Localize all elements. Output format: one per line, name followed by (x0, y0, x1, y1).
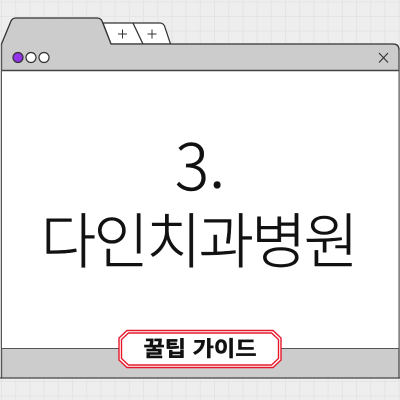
tab: plus one (103, 23, 143, 44)
tab: plus two (133, 23, 170, 44)
badge: tip guide (119, 330, 281, 368)
badge label: 꿀팁 가이드 (144, 333, 256, 363)
icon: close (379, 53, 388, 62)
window buttons (13, 52, 49, 62)
title: 3. (175, 117, 225, 209)
subtitle: 다인치과병원 (41, 194, 359, 281)
